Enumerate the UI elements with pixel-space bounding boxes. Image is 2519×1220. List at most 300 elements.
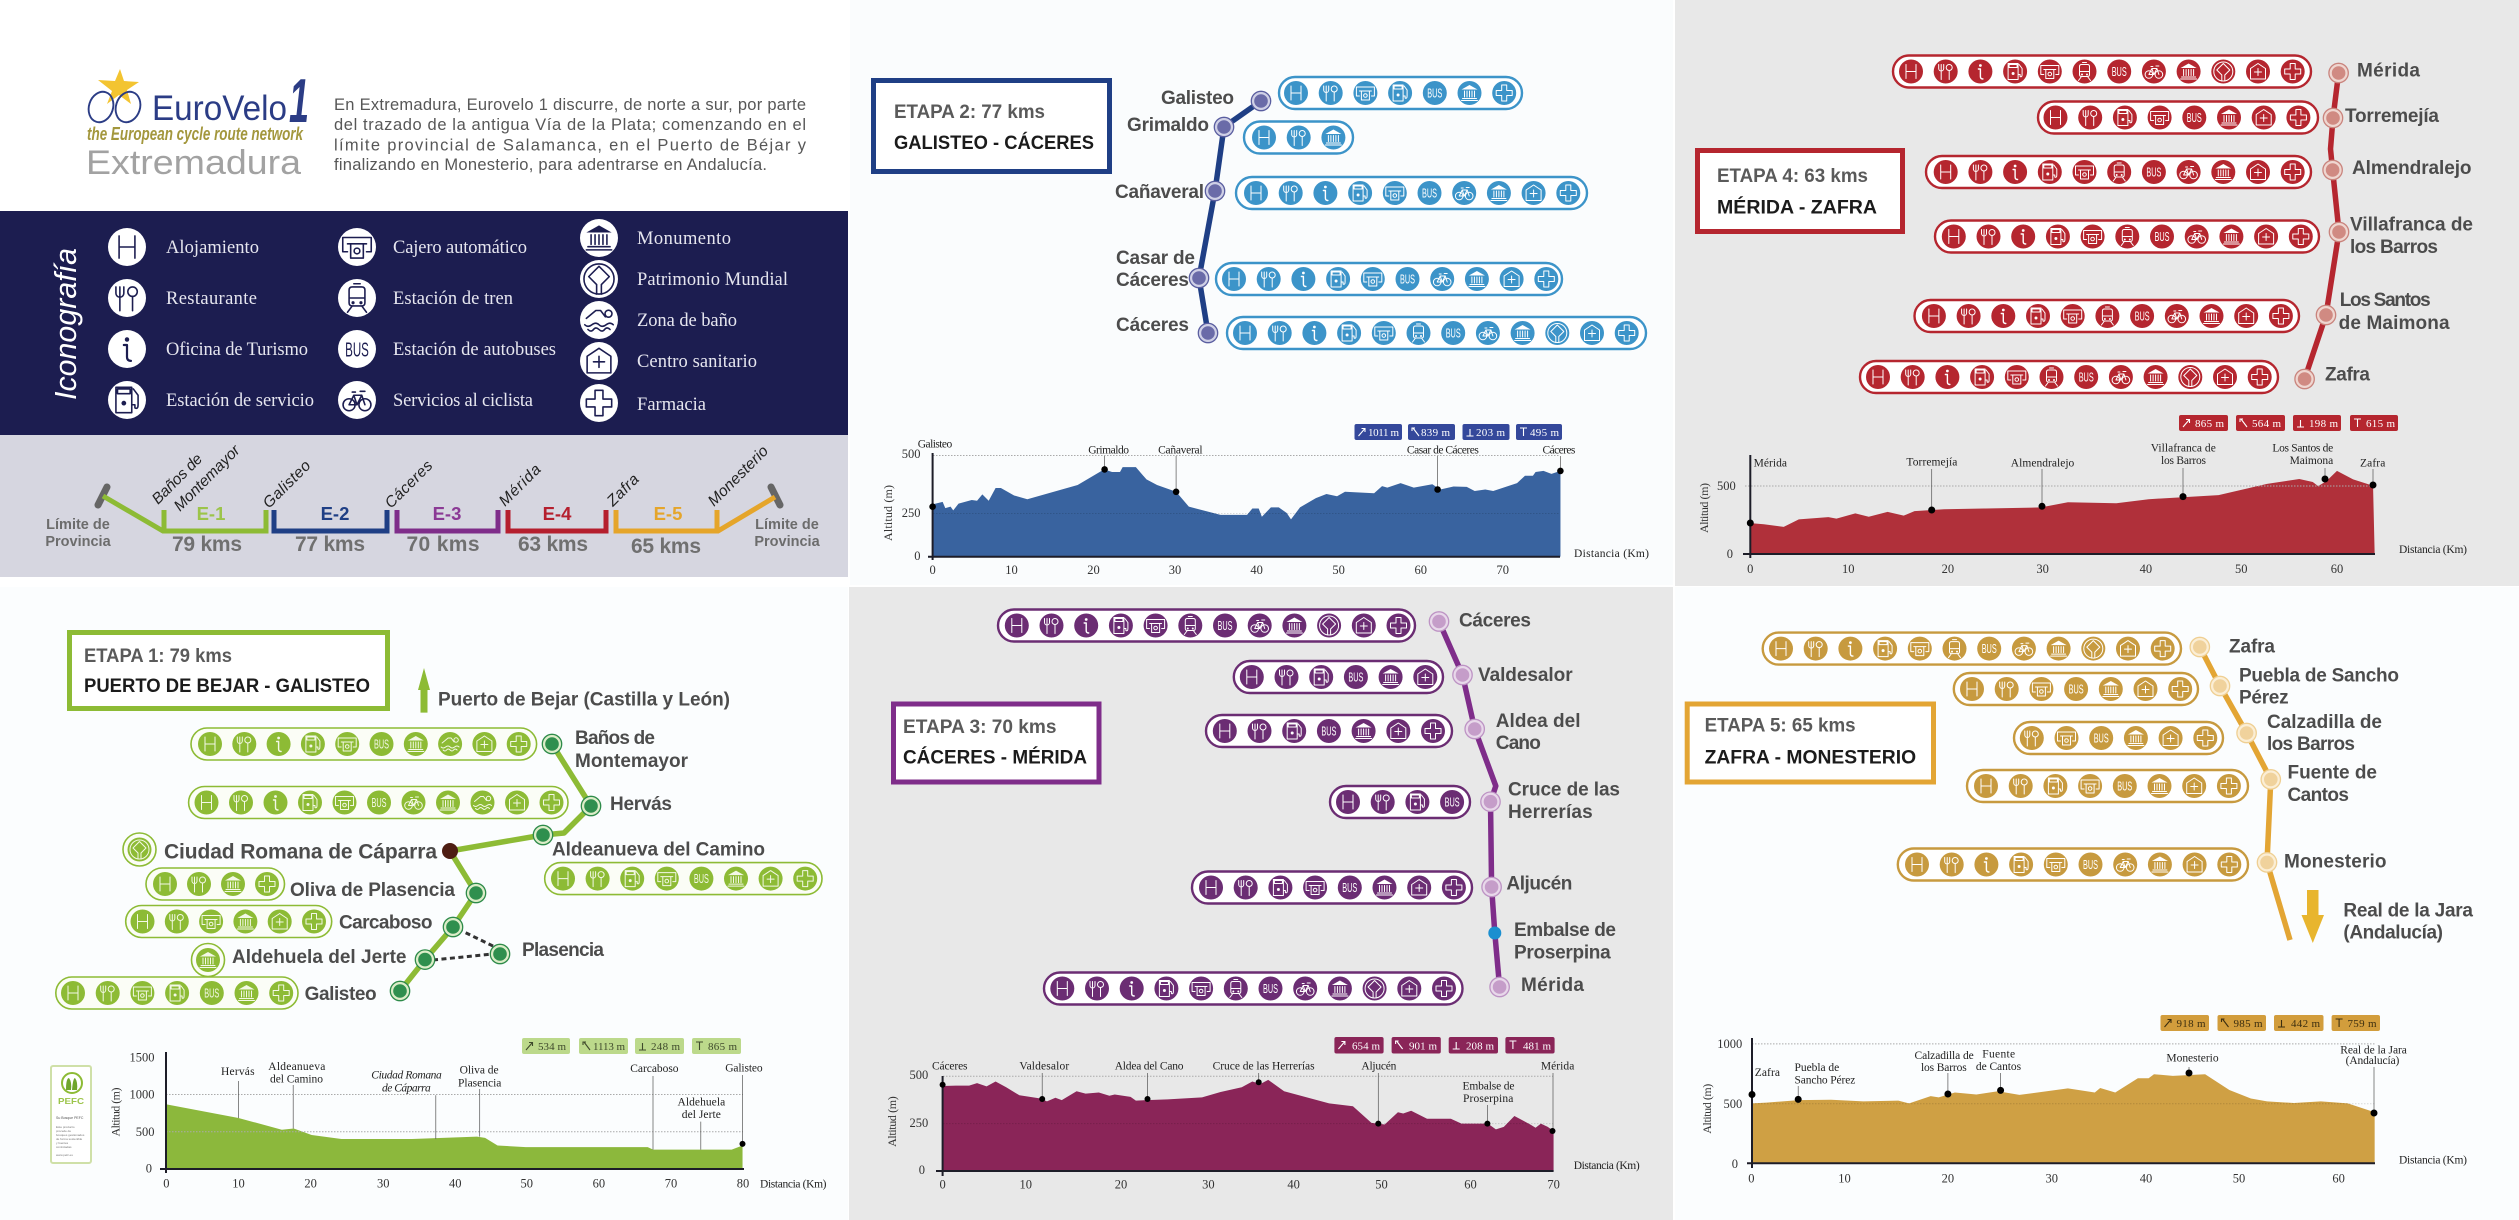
elevation profile area [943,1080,1554,1171]
panel: Etapa 3 Cáceres - Mérida [849,587,1673,1220]
stop labels: Carcaboso [339,912,432,933]
services pill: Galisteo: BUS [1427,86,1442,101]
label: Límite de Provincia right [754,517,821,550]
elevation chart [109,1051,827,1191]
elevation chart: Galisteo [725,1062,763,1074]
label: Límite de Provincia left [45,517,112,550]
stage title box [1687,704,1934,782]
stage E-5 bracket [616,497,775,558]
label: Límite de Provincia right: Provincia [754,534,821,550]
stop labels: Cáceres [1116,315,1189,336]
elevation chart: 50 [1332,563,1345,577]
services pill: Monesterio: BUS [2083,857,2098,872]
stage title box: MÉRIDA - ZAFRA [1717,196,1877,218]
services pill: Carcaboso [126,906,332,938]
elevation chart [1700,1037,2467,1185]
stop labels: Valdesalor [1478,665,1573,686]
elevation chart: 70 [1547,1178,1560,1192]
elevation chart: 60 [2331,562,2343,576]
legend: Alojamiento [108,228,259,266]
elevation chart: 70 [665,1177,677,1191]
stage E-1 bracket: 79 kms [172,533,242,556]
panel: Etapa 2 Galisteo - Cáceres [850,0,1673,585]
services pill: Baños de Montemayor [191,728,537,760]
elevation chart: Real de la Jara [2340,1045,2407,1057]
elevation chart: 40 [2140,1171,2152,1185]
label: Puerto de Bejar: Puerto de Bejar (Castilla y León) [438,690,730,711]
stats chips: 985 m [2234,1018,2263,1030]
label: Límite de Provincia left: Límite de [46,517,110,533]
elevation chart: 0 [919,1163,925,1177]
elevation chart: 10 [1020,1178,1032,1192]
stop labels: Oliva de Plasencia [290,880,455,901]
stop labels: Plasencia [522,940,604,961]
panel: Etapa 5 Zafra - Monesterio [1675,587,2519,1220]
elevation chart: Altitud (m) [1700,1084,1714,1134]
stats chips: 198 m [2309,418,2338,430]
legend: Servicios al ciclista: Servicios al ciclista [393,391,533,411]
overview route strip [0,435,848,577]
legend: Estación de tren [338,279,513,317]
route line [400,744,591,991]
elevation chart: Aldehuela [678,1096,725,1108]
elevation chart: 80 [737,1177,749,1191]
elevation chart: Carcaboso [630,1063,679,1075]
stats chips: 654 m [1352,1040,1380,1052]
elevation chart: 0 [929,563,936,577]
elevation chart: Grimaldo [1088,445,1129,457]
elevation profile area [166,1104,743,1169]
stats chips: 839 m [1421,427,1450,439]
stats chips: 865 m [2195,418,2224,430]
elevation chart: 250 [902,506,920,520]
elevation chart: 500 [136,1125,154,1139]
elevation chart: 60 [593,1177,605,1191]
services pill: Puebla de Sancho Pérez: BUS [2069,682,2084,697]
elevation chart: Distancia (Km) [1574,1160,1640,1172]
stop labels: Mérida [1521,975,1584,996]
elevation chart: 70 [1496,563,1509,577]
legend: Monumento [580,219,731,257]
elevation chart: (Andalucía) [2346,1055,2400,1067]
stage E-2 bracket: 77 kms [295,533,365,556]
elevation chart: Embalse de [1462,1081,1514,1093]
elevation chart: 1500 [130,1051,154,1065]
services pill: Cáceres [998,610,1415,642]
services pill: Almendralejo [1926,156,2311,188]
stats chips: 442 m [2291,1018,2320,1030]
stop labels: Galisteo [1161,88,1234,109]
stage E-5 bracket: E-5 [654,503,682,524]
elevation chart: Mérida [1541,1060,1574,1072]
iconography legend band [0,211,848,435]
elevation chart: Torremejía [1906,456,1957,468]
services pill: Fuente de Cantos [1967,770,2248,802]
stop labels: Aldea del [1496,711,1580,732]
services pill: Zafra: BUS [2079,370,2094,385]
elevation chart: 30 [2045,1171,2058,1185]
logo: EuroVelo 1 Extremadura [85,67,309,182]
stop labels [2229,637,2473,944]
PEFC certification label [51,1066,91,1163]
elevation chart: 20 [304,1177,317,1191]
legend: Estación de servicio: Estación de servicio [166,391,314,411]
elevation chart: Calzadilla de [1914,1050,1974,1062]
stage E-4 bracket: 63 kms [518,533,588,556]
rotated town labels: Baños de [149,450,206,508]
services pill: Galisteo [1279,77,1522,109]
stop labels: Monesterio [2284,851,2386,872]
legend: Estación de autobuses: Estación de autobuses [393,340,556,360]
stage E-4 bracket: E-4 [543,503,572,524]
elevation chart: 500 [1717,479,1736,493]
elevation chart: 500 [902,447,920,461]
elevation chart: 40 [2140,562,2152,576]
PEFC certification label: Este producto [56,1125,75,1129]
panel: Etapa 4 Mérida - Zafra [1675,0,2519,586]
panel: introduction and iconography [0,0,848,577]
stop labels: Almendralejo [2352,158,2472,179]
elevation chart: del Camino [270,1073,323,1085]
route stops [1189,91,1271,343]
elevation chart: 250 [910,1116,928,1130]
elevation chart: Altitud (m) [109,1088,123,1136]
stop labels: Cantos [2288,785,2349,806]
services pill: Mérida: BUS [2112,64,2127,79]
stop labels: Aljucén [1506,874,1572,895]
elevation chart: Zafra [2360,457,2385,469]
elevation chart: 60 [1464,1178,1477,1192]
services pill: Casar de Cáceres: BUS [1400,272,1415,287]
stats chips: 208 m [1466,1040,1494,1052]
stop labels: Cruce de las [1508,780,1620,801]
elevation chart [881,439,1649,577]
elevation chart: Los Santos de [2272,442,2333,454]
elevation chart: 40 [449,1177,462,1191]
PEFC certification label: y fuentes [56,1141,69,1145]
stage E-3 bracket: E-3 [433,503,461,524]
stats chips: 918 m [2176,1018,2206,1030]
stop labels: Puebla de Sancho [2239,665,2399,686]
PEFC certification label: PEFC [58,1096,84,1106]
stop labels: Baños de [575,728,655,749]
elevation chart: Galisteo [918,439,952,451]
intro paragraph: límite provincial de Salamanca, en el Puerto de Béjar y [334,136,807,154]
elevation chart: 40 [1287,1178,1300,1192]
stop labels [164,728,765,1005]
services pill: Torremejía [2038,102,2318,134]
stats chips [1334,1037,1555,1054]
stop labels [1115,88,1234,336]
heading: Iconografía: Iconografía [48,248,83,400]
arrow: towards Puerto de Béjar [418,668,430,713]
stats chips [2179,415,2398,431]
services pill: Los Santos de Maimona: BUS [2135,309,2150,324]
PEFC certification label: controladas [56,1145,72,1149]
stop labels: Grimaldo [1127,115,1209,136]
stop labels: los Barros [2267,734,2355,755]
elevation chart: 10 [1005,563,1018,577]
services pill: Cañaveral [1236,177,1587,209]
services pill: Grimaldo [1244,122,1353,154]
elevation chart: Altitud (m) [881,485,895,541]
stats chips: 1113 m [593,1041,625,1053]
services pill: Aldea del Cano [1206,715,1452,747]
services pill: Aldea del Cano: BUS [1321,724,1337,739]
stop labels: Proserpina [1514,942,1611,963]
stats chips: 495 m [1530,427,1559,439]
elevation chart: 0 [1727,547,1733,561]
elevation chart: Monesterio [2166,1053,2219,1065]
stop labels: Torremejía [2345,106,2439,127]
legend: Cajero automático: Cajero automático [393,238,527,258]
elevation chart: Cañaveral [1158,445,1203,457]
elevation chart: Zafra [1755,1067,1780,1079]
stats chips: 564 m [2252,418,2281,430]
stop labels: Herrerías [1508,802,1593,823]
legend: Servicios al ciclista [338,381,533,419]
elevation profile area [1752,1074,2375,1163]
stage E-1 bracket [103,496,266,556]
elevation chart: Aljucén [1361,1060,1397,1072]
services pill: Cáceres: BUS [1217,618,1233,633]
legend: Centro sanitario [580,342,757,380]
stage title box [874,80,1110,172]
elevation chart: 0 [1748,1171,1755,1185]
route stops [1429,612,1509,997]
services pill: Oliva de Plasencia [146,868,284,900]
elevation chart: 0 [1732,1157,1738,1171]
stage E-2 bracket [274,503,387,556]
elevation chart: del Jerte [682,1109,721,1121]
stop labels: Aldehuela del Jerte [232,947,406,968]
elevation chart: Plasencia [458,1077,501,1089]
services pill: Casar de Cáceres [1216,263,1562,295]
stats chips: 1011 m [1368,427,1399,439]
arrow: towards Real de la Jara [2302,890,2324,943]
route line [1439,622,1500,987]
stop labels [2325,60,2473,386]
stage title box [894,704,1099,782]
stop labels: Casar de [1116,248,1195,269]
elevation profile area [1750,471,2375,554]
elevation chart: Distancia (Km) [1574,548,1649,560]
services pill: Aljucén: BUS [1342,880,1357,895]
stats chips: 203 m [1476,427,1505,439]
services pill: Valdesalor [1234,661,1443,693]
stop labels: Cáceres [1459,611,1531,632]
services pill: Valdesalor: BUS [1348,670,1364,685]
elevation chart: 20 [1087,563,1100,577]
elevation chart: 50 [521,1177,533,1191]
elevation chart: 500 [1724,1097,1742,1111]
elevation chart: Distancia (Km) [760,1179,827,1191]
services pill: Baños de Montemayor: BUS [374,737,389,752]
stats chips [522,1038,741,1054]
elevation chart: 0 [163,1177,170,1191]
PEFC certification label: Su Bosque PEFC [56,1116,84,1120]
elevation chart: 0 [1747,562,1753,576]
legend: Estación de autobuses: BUS [345,338,369,361]
stage title box [1698,150,1902,232]
province limit post left [98,487,107,505]
elevation chart: Fuente [1982,1049,2015,1061]
services pill: Cáceres [1227,317,1646,349]
rotated town labels: Mérida [496,461,545,510]
elevation chart: 1000 [130,1088,154,1102]
stop labels: Mérida [2357,60,2420,82]
legend: Estación de servicio [108,381,314,419]
services pill: Mérida [1893,56,2311,88]
rotated town labels: Monesterio [705,442,772,510]
stop labels: Los Santos [2340,290,2431,311]
services pill: Aljucén [1192,872,1472,904]
route stops [390,734,601,1001]
elevation chart: los Barros [1921,1062,1967,1074]
stop labels: Real de la Jara [2343,900,2473,921]
stage title box: ETAPA 1: 79 kms [84,645,232,667]
legend: Patrimonio Mundial: Patrimonio Mundial [637,270,788,290]
intro paragraph [334,96,807,174]
elevation chart: Almendralejo [2011,457,2075,469]
legend: Estación de tren: Estación de tren [393,289,513,309]
elevation chart: Mérida [1754,457,1787,469]
elevation chart: Sancho Pérez [1794,1075,1855,1087]
elevation chart: Distancia (Km) [2399,544,2467,556]
elevation chart: 0 [146,1162,152,1176]
elevation chart: Hervás [221,1066,255,1078]
rotated town labels: Cáceres [382,457,436,512]
legend: Zona de baño: Zona de baño [637,311,737,331]
services pill: Calzadilla de los Barros: BUS [2094,731,2109,746]
stop labels: Hervás [610,794,672,815]
route line [2305,73,2339,379]
stats chips: 534 m [538,1041,566,1053]
services pill: Torremejía: BUS [2187,110,2202,125]
elevation chart: 10 [1842,562,1855,576]
stage E-4 bracket [508,503,606,556]
elevation chart: 20 [1942,562,1954,576]
services pill: Calzadilla de los Barros [2014,722,2223,754]
stop labels: (Andalucía) [2343,923,2443,944]
elevation chart: 30 [1169,563,1181,577]
stage title box: ETAPA 3: 70 kms [903,716,1057,738]
legend: Cajero automático [338,228,527,266]
elevation chart: 40 [1250,563,1263,577]
stats chips: 615 m [2366,418,2395,430]
elevation chart: Aldea del Cano [1115,1060,1184,1072]
rotated town labels [149,441,772,515]
services pill: Los Santos de Maimona [1914,300,2299,332]
stop labels: Cañaveral [1115,182,1204,203]
stop labels: Montemayor [575,751,689,772]
elevation chart: 1000 [1717,1037,1742,1051]
elevation chart: 0 [914,549,920,563]
elevation chart: Valdesalor [1019,1060,1069,1072]
logo: EuroVelo 1 Extremadura: 1 [289,67,309,136]
legend: Monumento: Monumento [637,229,731,249]
legend: Oficina de Turismo: Oficina de Turismo [166,340,308,360]
rotated town labels: Galisteo [260,457,315,512]
stop labels: Pérez [2239,688,2289,709]
legend: Centro sanitario: Centro sanitario [637,352,757,372]
elevation chart: de Cantos [1976,1061,2022,1073]
stop labels: Calzadilla de [2267,712,2382,733]
stats chips: 248 m [651,1041,680,1053]
elevation chart: Maimona [2290,455,2333,467]
route stops [2190,637,2280,872]
stop labels: Zafra [2325,365,2370,386]
legend: Patrimonio Mundial [580,260,788,298]
stage title box: ETAPA 5: 65 kms [1705,715,1856,737]
stop labels: Cano [1496,733,1541,754]
elevation chart: Cáceres [1542,445,1576,457]
stage title box [70,632,388,708]
stage title box: PUERTO DE BEJAR - GALISTEO [84,675,370,697]
services pill: Zafra [1860,361,2278,393]
legend: Farmacia [580,384,706,422]
elevation chart: 50 [2233,1171,2245,1185]
panel: Etapa 1 Puerto de Béjar - Galisteo [0,587,848,1220]
stop labels: los Barros [2350,237,2438,258]
stage E-3 bracket: 70 kms [406,533,480,556]
stop labels: Galisteo [305,984,377,1005]
PEFC certification label: www.pefc.es [56,1153,73,1157]
elevation chart: los Barros [2161,455,2207,467]
elevation chart: 60 [2332,1171,2345,1185]
route line [1199,101,1261,333]
services pill: Cañaveral: BUS [1422,186,1437,201]
stop labels [1459,611,1620,996]
elevation profile area [933,467,1560,557]
services pill: Galisteo [56,977,298,1009]
services pill: Cáceres: BUS [1446,326,1461,341]
elevation chart: Ciudad Romana [371,1069,442,1081]
stop labels: Ciudad Romana de Cáparra [164,840,437,863]
stage E-5 bracket: 65 kms [631,535,701,558]
route stops [2295,63,2349,389]
legend: Alojamiento: Alojamiento [166,238,259,258]
legend: Restaurante [108,279,257,317]
stats chips [2160,1015,2380,1031]
legend: Estación de autobuses [338,330,556,368]
legend: Zona de baño [580,301,737,339]
elevation chart: 500 [910,1068,928,1082]
services pill: Zafra: BUS [1982,641,1997,656]
stage title box: CÁCERES - MÉRIDA [903,746,1087,769]
route line [2200,647,2290,940]
stats chips: 901 m [1409,1040,1437,1052]
services pill: Fuente de Cantos: BUS [2117,779,2132,794]
stop labels: Fuente de [2288,763,2377,784]
services pill: Zafra [1763,633,2181,665]
rotated town labels: Zafra [603,471,643,511]
elevation chart: Oliva de [460,1064,499,1076]
services pill: Hervás: BUS [372,795,387,810]
elevation chart: Altitud (m) [885,1096,899,1147]
services pill: Mérida [1044,972,1462,1004]
elevation chart: Villafranca de [2151,442,2216,454]
stop labels: Aldeanueva del Camino [552,840,765,860]
elevation chart: Distancia (Km) [2399,1154,2467,1166]
stage title box: GALISTEO - CÁCERES [894,131,1094,154]
intro paragraph: del trazado de la antigua Vía de la Plata; comenzando en el [334,116,806,134]
logo: EuroVelo 1 Extremadura: the European cycle route network [87,124,304,144]
elevation chart: Proserpina [1463,1093,1513,1105]
stage E-1 bracket: E-1 [197,503,225,524]
elevation chart: Altitud (m) [1697,483,1711,533]
PEFC certification label: de forma sostenible [56,1137,83,1141]
